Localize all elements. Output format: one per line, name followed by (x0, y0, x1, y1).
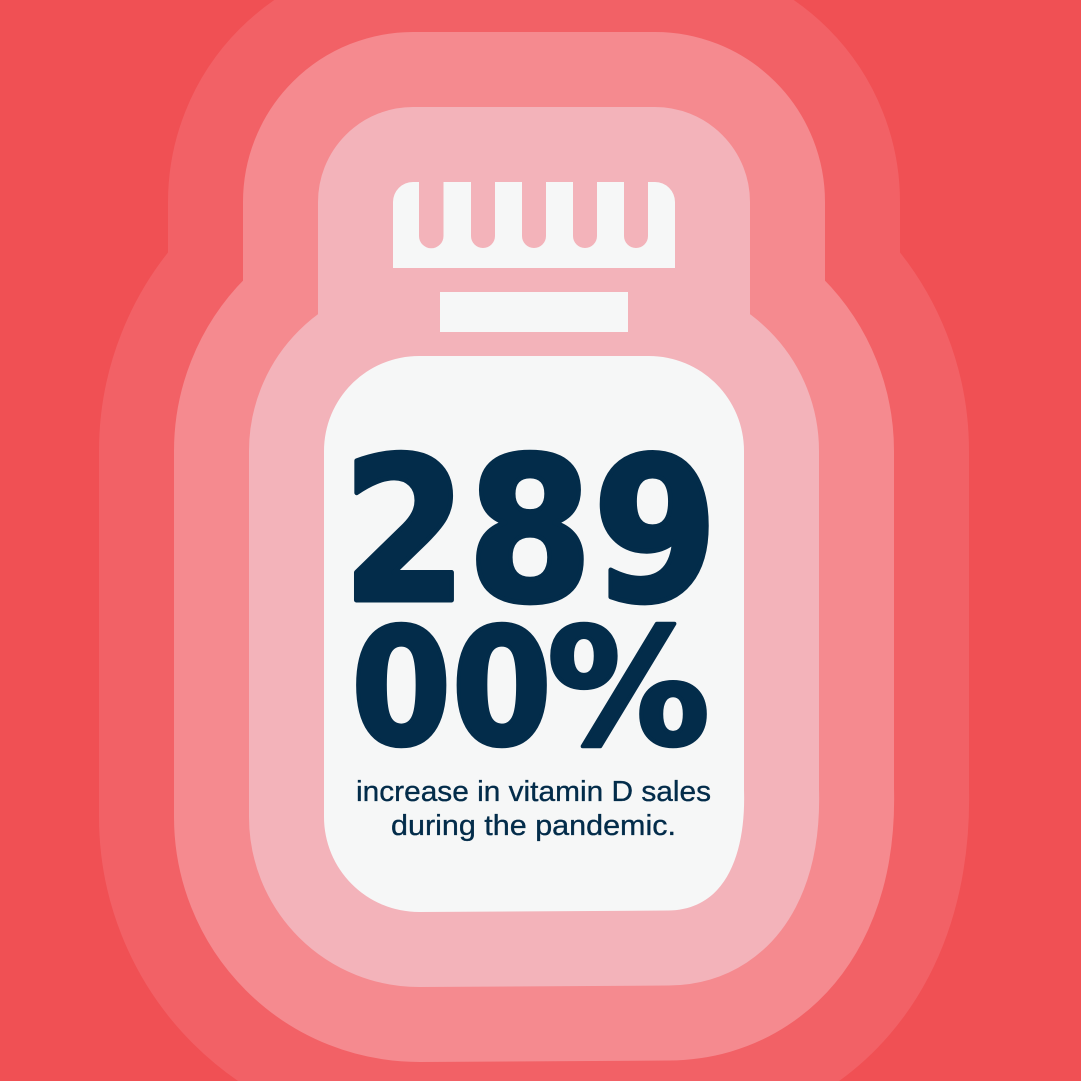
outer bottle halo (324, 182, 744, 912)
panel: bottle label body (324, 356, 744, 912)
icon: bottle neck (440, 292, 628, 332)
statistic: 289 00% (342, 415, 718, 783)
statistic: 289 00%: 289 (342, 415, 718, 647)
statistic: 289 00%: 00 (351, 595, 552, 783)
caption: increase in vitamin D sales (356, 776, 711, 808)
middle bottle halo (324, 182, 744, 912)
inner bottle halo (324, 182, 744, 912)
statistic: 289 00%: % (547, 595, 710, 783)
icon: bottle cap (393, 182, 675, 268)
caption (356, 776, 711, 842)
caption: during the pandemic. (391, 810, 676, 842)
